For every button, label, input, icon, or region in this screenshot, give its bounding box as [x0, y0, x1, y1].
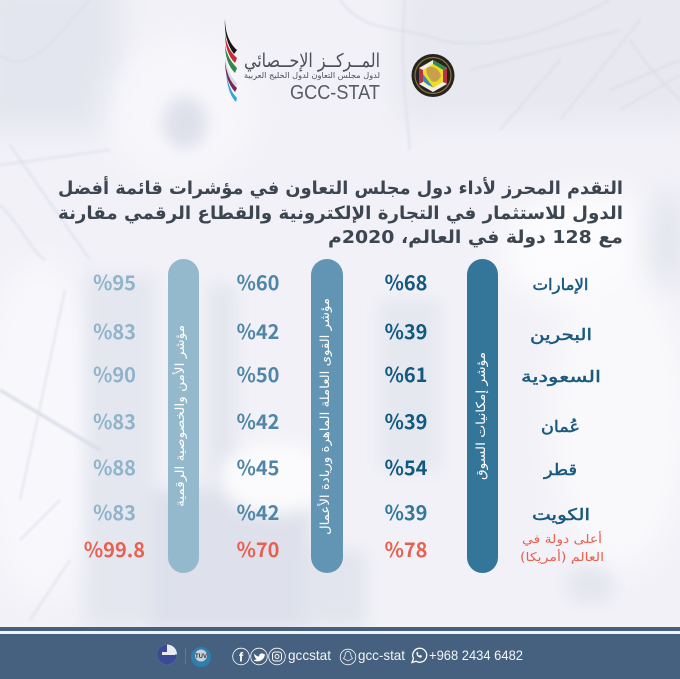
title: [58, 176, 623, 248]
column: countries: عُمان: [541, 417, 580, 436]
values: skilled workforce: [237, 267, 279, 563]
panel: security and privacy: [84, 259, 199, 573]
values: market potential: %39: [385, 316, 427, 345]
icon: TUV badge: TUV: [195, 654, 207, 660]
values: security and privacy: %99.8: [84, 534, 145, 563]
values: market potential: %68: [385, 267, 427, 296]
handle: gccstat: gccstat: [288, 647, 331, 663]
pill: market potential: مؤشر إمكانيات السوق: [473, 352, 489, 480]
title: التقدم المحرز لأداء دول مجلس التعاون في مؤشرات قائمة أفضل: [58, 176, 623, 199]
values: market potential: %78: [385, 534, 427, 563]
values: skilled workforce: %45: [237, 452, 279, 481]
handle: gcc-stat: gcc-stat: [358, 647, 405, 663]
title: الدول للاستثمار في التجارة الإلكترونية والقطاع الرقمي مقارنة: [58, 203, 623, 224]
icon: facebook: f: [239, 650, 244, 664]
values: security and privacy: %95: [93, 267, 136, 296]
icon: snapchat: [340, 649, 356, 665]
logo latin name: GCC-STAT: [290, 82, 380, 104]
values: skilled workforce: %70: [237, 534, 279, 563]
column: countries: الكويت: [532, 505, 590, 525]
logo: GCC-STAT: [225, 18, 380, 104]
values: security and privacy: %83: [93, 406, 136, 435]
icon: twitter: [251, 648, 267, 665]
phone number: +968 2434 6482: [429, 647, 523, 663]
panel: skilled workforce: [237, 259, 343, 573]
icon: certification badge 1: [157, 644, 177, 665]
column: countries: السعودية: [521, 367, 601, 387]
values: skilled workforce: %50: [237, 359, 279, 388]
values: security and privacy: [84, 267, 145, 563]
values: skilled workforce: %60: [237, 267, 279, 296]
values: skilled workforce: %42: [237, 316, 279, 345]
pill: skilled workforce: [311, 259, 343, 573]
icon: TUV badge: [191, 647, 211, 667]
values: market potential: %39: [385, 406, 427, 435]
values: security and privacy: %83: [93, 497, 136, 526]
pill: skilled workforce: مؤشر القوى العاملة الماهرة وريادة الأعمال: [317, 298, 333, 535]
values: skilled workforce: %42: [237, 497, 279, 526]
column: countries: العالم (أمريكا): [520, 549, 604, 565]
column: countries: [520, 275, 604, 565]
values: skilled workforce: %42: [237, 406, 279, 435]
pill: security and privacy: مؤشر الأمن والخصوصية الرقمية: [172, 325, 188, 507]
values: market potential: %39: [385, 497, 427, 526]
pill: market potential: [467, 259, 498, 573]
logo ribbon: [225, 18, 237, 102]
values: security and privacy: %90: [93, 359, 136, 388]
icon: whatsapp: [412, 648, 427, 662]
column: countries: قطر: [543, 460, 577, 480]
values: market potential: [385, 267, 428, 563]
column: countries: الإمارات: [532, 275, 588, 295]
footer: [0, 627, 680, 679]
values: market potential: %54: [385, 452, 428, 481]
title: مع 128 دولة في العالم، 2020م: [328, 227, 623, 248]
values: security and privacy: %83: [93, 316, 136, 345]
panel: market potential: [385, 259, 498, 573]
column: countries: البحرين: [530, 325, 592, 345]
logo arabic name: المــركــز الإحــصائي: [244, 50, 380, 72]
logo subtitle: لدول مجلس التعاون لدول الخليج العربية: [244, 71, 380, 80]
pill: security and privacy: [168, 259, 199, 573]
icon: GCC emblem: [412, 54, 454, 97]
icon: facebook: [233, 648, 249, 665]
values: security and privacy: %88: [93, 452, 136, 481]
top country note: أعلى دولة في: [522, 531, 602, 547]
values: market potential: %61: [385, 359, 427, 388]
icon: instagram: [269, 648, 285, 665]
